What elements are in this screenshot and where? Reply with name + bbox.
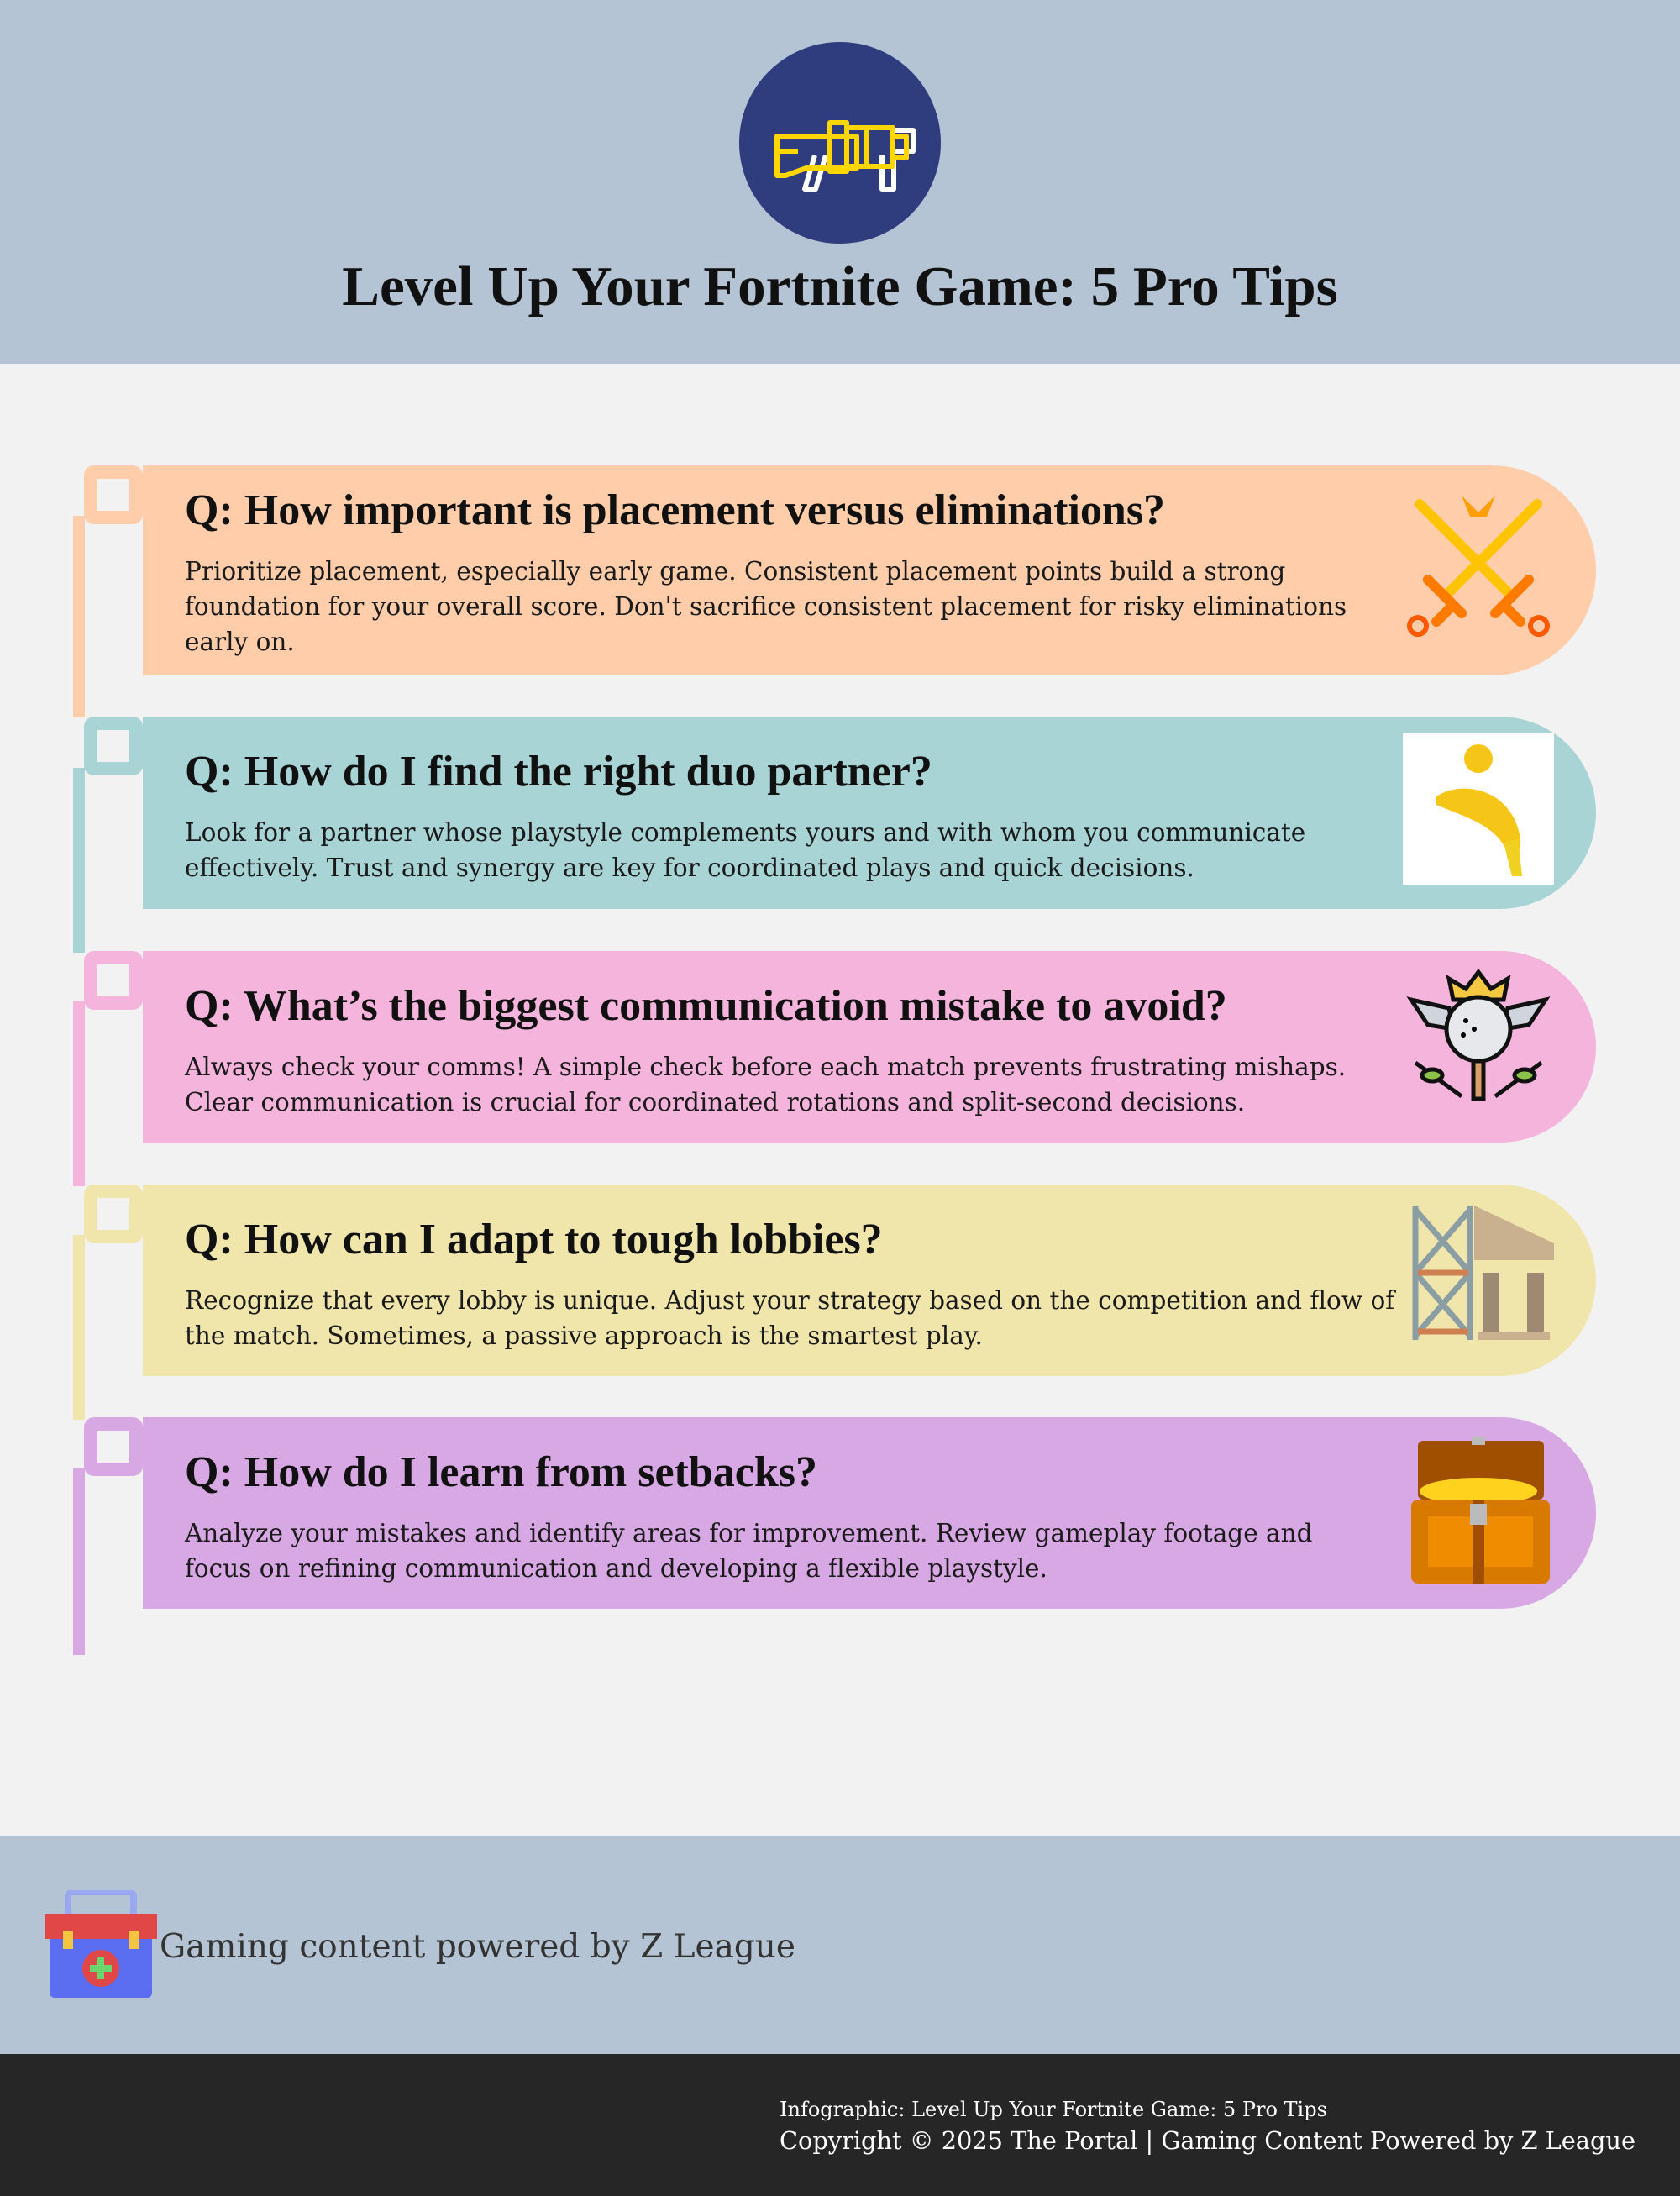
panel: tip 3	[143, 951, 1596, 1143]
icon: banana figure	[1403, 733, 1554, 885]
panel: tip 1: early on.	[185, 628, 295, 656]
panel: tip 5: Analyze your mistakes and identify areas for improvement. Review gameplay footage and	[185, 1519, 1312, 1547]
panel: tip 4: Q: How can I adapt to tough lobbies?	[185, 1216, 883, 1263]
marker 1	[84, 465, 143, 524]
panel: tip 2: Look for a partner whose playstyle complements yours and with whom you communicate	[185, 818, 1305, 847]
panel: tip 5: Q: How do I learn from setbacks?	[185, 1448, 817, 1496]
panel: tip 2: effectively. Trust and synergy are key for coordinated plays and quick decisions.	[185, 854, 1194, 882]
marker 5	[84, 1417, 143, 1476]
footer text: Gaming content powered by Z League	[160, 1928, 795, 1966]
panel: tip 1: Q: How important is placement versus eliminations?	[185, 486, 1165, 534]
icon: crowned golf ball	[1406, 969, 1551, 1101]
panel: tip 4	[143, 1185, 1596, 1376]
panel: tip 4: Recognize that every lobby is unique. Adjust your strategy based on the competition and flow of	[185, 1286, 1394, 1315]
icon: crossed swords	[1407, 496, 1550, 637]
panel: tip 2	[143, 717, 1596, 909]
bottom bar	[0, 2054, 1680, 2196]
header band	[0, 0, 1680, 364]
marker 4	[84, 1185, 143, 1243]
marker 2	[84, 717, 143, 775]
panel: tip 3: Q: What’s the biggest communication mistake to avoid?	[185, 982, 1227, 1030]
icon: scaffold building	[1413, 1206, 1554, 1340]
icon: toolbox	[45, 1890, 157, 1998]
panel: tip 4: the match. Sometimes, a passive approach is the smartest play.	[185, 1321, 983, 1350]
footer band	[0, 1836, 1680, 2054]
panel: tip 3: Clear communication is crucial for coordinated rotations and split-second decisions.	[185, 1088, 1245, 1116]
panel: tip 3: Always check your comms! A simple check before each match prevents frustrating mishaps.	[185, 1053, 1346, 1081]
panel: tip 1	[143, 465, 1596, 675]
icon: rocket launcher circle	[739, 42, 941, 244]
panel: tip 1: foundation for your overall score. Don't sacrifice consistent placement for risky eliminations	[185, 592, 1347, 621]
panel: tip 5: focus on refining communication and developing a flexible playstyle.	[185, 1554, 1047, 1583]
timeline lines	[73, 516, 85, 717]
credit lines: Infographic: Level Up Your Fortnite Game: 5 Pro Tips	[780, 2098, 1327, 2121]
icon: treasure chest	[1411, 1437, 1550, 1584]
panel: tip 5	[143, 1417, 1596, 1609]
title: Level Up Your Fortnite Game: 5 Pro Tips	[342, 255, 1338, 318]
bottom bar: Copyright © 2025 The Portal | Gaming Content Powered by Z League	[780, 2126, 1635, 2155]
marker 3	[84, 951, 143, 1010]
panel: tip 2: Q: How do I find the right duo partner?	[185, 748, 932, 796]
panel: tip 1: Prioritize placement, especially early game. Consistent placement points build a strong	[185, 557, 1285, 586]
